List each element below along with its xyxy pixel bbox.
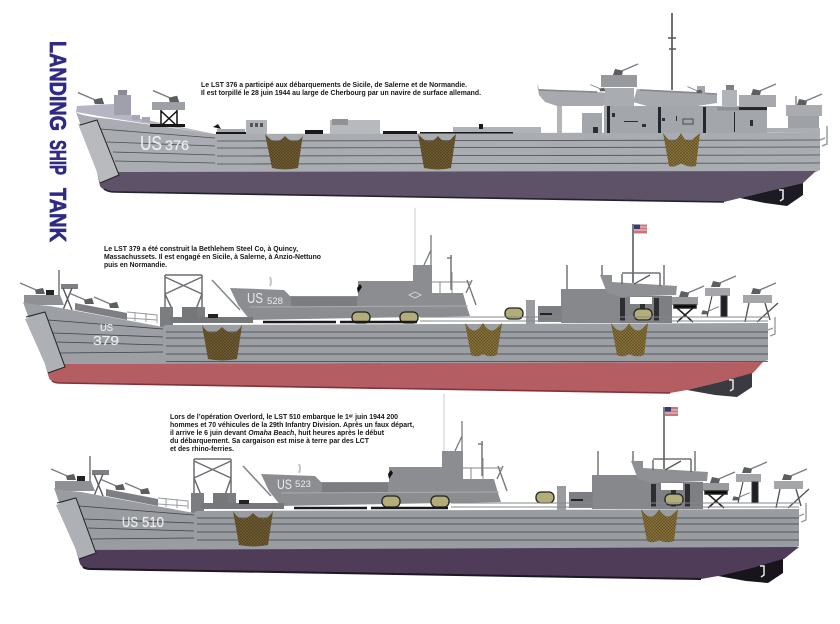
strake lines — [100, 129, 820, 164]
text block: LST 510: il arrive le 6 juin devant Omaha Beach, huit heures après le début — [170, 428, 385, 437]
flag — [632, 224, 634, 283]
hull upper grey — [54, 488, 799, 550]
LCT deck landing craft: US — [247, 290, 263, 307]
hull upper grey — [76, 112, 820, 172]
ship: LST 510 — [51, 394, 809, 583]
text block: LST 376: Il est torpillé le 28 juin 1944 au large de Cherbourg par un navire de surface allemand. — [201, 88, 481, 97]
antenna — [414, 208, 416, 265]
rudder and skeg — [687, 373, 752, 397]
boat — [631, 461, 708, 483]
text block: LST 379 — [104, 244, 322, 269]
hull upper grey — [23, 302, 768, 364]
text block: LST 379: Le LST 379 a été construit la Bethlehem Steel Co, à Quincy, — [104, 244, 298, 253]
title: TANK — [45, 188, 71, 242]
strake lines — [48, 320, 768, 362]
deck rail — [451, 503, 799, 507]
text block: LST 510: et des rhino-ferries. — [170, 444, 234, 453]
antenna — [443, 394, 445, 451]
hull number: 510 — [142, 514, 164, 531]
stern rail — [820, 126, 827, 146]
bow door — [78, 120, 119, 183]
LCT deck landing craft: US — [277, 476, 292, 492]
gun tubs — [672, 297, 698, 305]
flag — [663, 407, 665, 469]
hull number: US — [100, 323, 113, 334]
mast — [671, 13, 673, 90]
LCT deck landing craft: 528 — [267, 296, 283, 306]
title: LANDING — [45, 41, 71, 131]
aft deckhouse — [561, 289, 621, 323]
rudder and skeg — [740, 183, 803, 206]
hull number: US — [140, 133, 162, 155]
text block: LST 510: hommes et 70 véhicules de la 29th Infantry Division. Après un faux départ, — [170, 420, 414, 429]
title — [45, 41, 71, 242]
keel line — [52, 381, 670, 393]
hull number — [93, 323, 119, 348]
LCT deck landing craft — [243, 421, 507, 506]
text block: LST 510: Lors de l’opération Overlord, le LST 510 embarque le 1ᵉʳ juin 1944 200 — [170, 412, 398, 421]
rafts — [382, 496, 400, 507]
bridge deckhouse — [605, 88, 634, 108]
LCT deck landing craft: 523 — [295, 479, 311, 489]
hull lower red — [45, 362, 763, 393]
keel line — [104, 189, 724, 202]
bow door — [56, 498, 96, 559]
aft deckhouse — [592, 475, 652, 509]
hull lower purple — [97, 171, 816, 202]
davit frame — [191, 459, 284, 513]
hull lower purple — [76, 547, 799, 579]
bow superstructure — [51, 456, 188, 509]
davit frame — [160, 275, 253, 327]
ship: LST 379 — [20, 208, 778, 397]
rafts — [352, 312, 370, 323]
strake lines — [79, 506, 799, 540]
boat — [600, 275, 677, 297]
aft towers and tubs — [697, 86, 705, 94]
forward gun deck — [76, 104, 215, 134]
bridge wings — [537, 83, 620, 106]
hull number: 379 — [93, 334, 119, 348]
deck cargo — [217, 119, 541, 134]
forward tub with X frame — [152, 102, 185, 110]
cargo nets — [233, 509, 678, 546]
text block: LST 379: puis en Normandie. — [104, 260, 167, 269]
text block: LST 379: Massachussets. Il est engagé en Sicile, à Salerne, à Anzio-Nettuno — [104, 252, 322, 261]
hull number: US — [122, 514, 138, 531]
rudder and skeg — [718, 559, 783, 583]
LCT deck landing craft — [212, 235, 476, 320]
deck rail — [420, 317, 768, 321]
hull number — [122, 514, 164, 531]
keel line — [83, 567, 701, 579]
gun tubs — [703, 483, 729, 491]
cargo nets — [202, 323, 648, 360]
guns on bridge — [613, 64, 638, 75]
ship: LST 376 — [76, 13, 827, 206]
text block: LST 376: Le LST 376 a participé aux débarquements de Sicile, de Salerne et de Normandie. — [201, 80, 467, 89]
hull number: 376 — [165, 138, 189, 153]
text block: LST 510: du débarquement. Sa cargaison est mise à terre par des LCT — [170, 436, 370, 445]
stern rail — [768, 317, 775, 336]
text block: LST 376 — [201, 80, 481, 97]
cargo nets — [265, 133, 700, 170]
bow door — [25, 312, 65, 373]
title: SHIP — [45, 140, 71, 175]
bow superstructure — [20, 270, 157, 323]
hull number — [140, 133, 189, 155]
stern rail — [799, 503, 806, 522]
text block: LST 510 — [170, 412, 414, 453]
